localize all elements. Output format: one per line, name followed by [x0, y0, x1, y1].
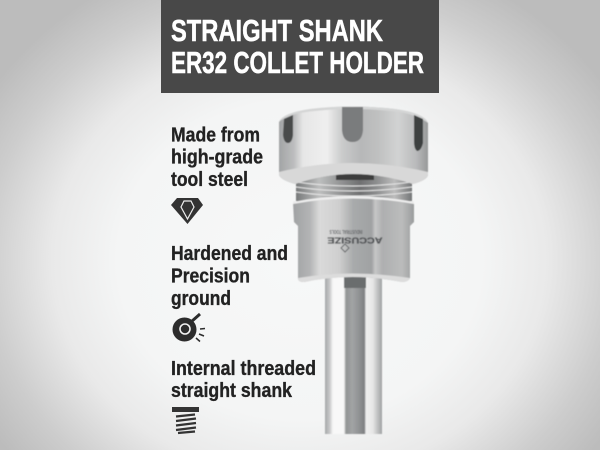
engraved logo [327, 228, 382, 252]
feature: hardened: Hardened and [171, 243, 288, 265]
threaded section [290, 172, 416, 204]
product photo: collet holder [279, 106, 428, 434]
feature: threaded shank: Internal threaded [171, 358, 316, 380]
feature: hardened: ground [171, 288, 231, 310]
feature: hardened [171, 243, 288, 310]
feature: tool steel: high-grade [171, 146, 263, 168]
feature: tool steel: tool steel [171, 169, 248, 191]
title banner [161, 0, 439, 93]
icon: thread screw [172, 407, 199, 433]
straight shank [325, 272, 382, 434]
feature: threaded shank: straight shank [171, 380, 293, 402]
feature: threaded shank [171, 358, 316, 402]
engraved logo: INDUSTRIAL TOOLS [329, 228, 362, 234]
shank body section [293, 196, 414, 282]
nut slots [342, 107, 363, 142]
feature: hardened: Precision [171, 266, 250, 288]
feature: tool steel [171, 124, 263, 191]
title banner: STRAIGHT SHANK [171, 13, 383, 48]
engraved logo: ACCUSIZE [327, 236, 382, 244]
feature: tool steel: Made from [171, 124, 260, 146]
icon: diamond [171, 198, 203, 224]
title banner: ER32 COLLET HOLDER [171, 45, 424, 80]
icon: grinding wheel [172, 314, 205, 342]
collet nut [279, 106, 428, 184]
